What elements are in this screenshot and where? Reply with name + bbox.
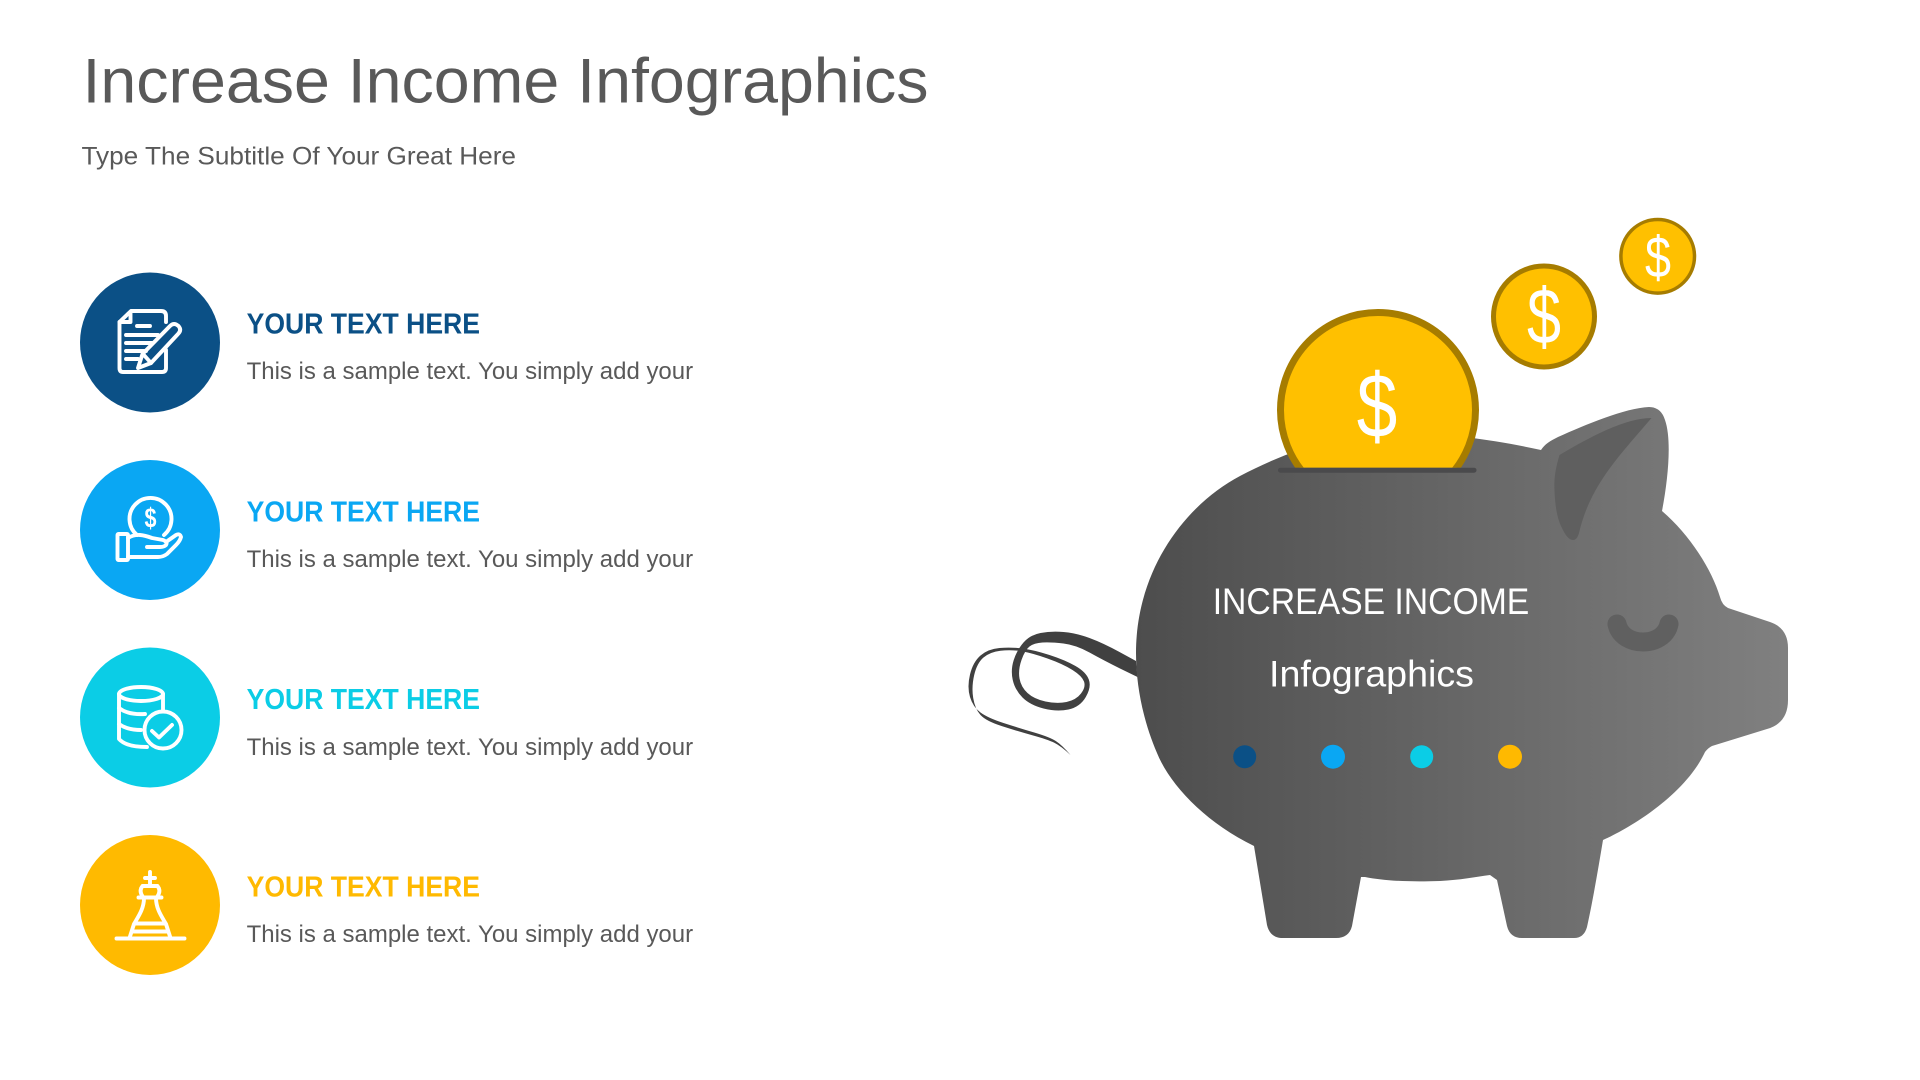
small coin: $	[1645, 225, 1671, 290]
panel: item 1	[80, 272, 693, 412]
panel: item 2	[80, 460, 693, 600]
text: item 1: This is a sample text. You simply add your	[247, 358, 693, 385]
pig inner ear	[1554, 418, 1652, 540]
heading: item 4: YOUR TEXT HERE	[247, 872, 480, 904]
icon: hand holding coin: $	[144, 502, 157, 534]
big coin in slot: $	[1357, 356, 1397, 457]
big coin in slot	[1277, 309, 1479, 468]
pig body	[1136, 407, 1788, 938]
heading: item 3: YOUR TEXT HERE	[247, 684, 480, 716]
pig eye	[1617, 624, 1669, 642]
heading on pig: INCREASE INCOME	[1213, 581, 1529, 622]
heading: item 1: YOUR TEXT HERE	[247, 308, 480, 340]
subheading on pig: Infographics	[1269, 654, 1474, 694]
text: item 4: This is a sample text. You simply add your	[247, 921, 693, 948]
medium coin: $	[1527, 272, 1561, 360]
icon: chess king	[80, 835, 220, 975]
illustration: piggy bank	[968, 312, 1788, 938]
icon: database with check	[80, 648, 220, 788]
panel: item 3	[80, 648, 693, 788]
icon: document and pencil	[80, 272, 220, 412]
title: Increase Income Infographics	[82, 47, 928, 117]
text: item 3: This is a sample text. You simply add your	[247, 734, 693, 761]
text: item 2: This is a sample text. You simply add your	[247, 546, 693, 573]
subtitle: Type The Subtitle Of Your Great Here	[82, 142, 516, 170]
legend dots	[1233, 745, 1522, 769]
infographic canvas	[80, 56, 1788, 975]
icon: hand holding coin	[80, 460, 220, 600]
pig tail	[968, 632, 1138, 755]
small coin	[1621, 219, 1694, 293]
coin slot	[1278, 468, 1476, 473]
heading: item 2: YOUR TEXT HERE	[247, 496, 480, 528]
medium coin	[1494, 266, 1594, 367]
panel: item 4	[80, 835, 693, 975]
